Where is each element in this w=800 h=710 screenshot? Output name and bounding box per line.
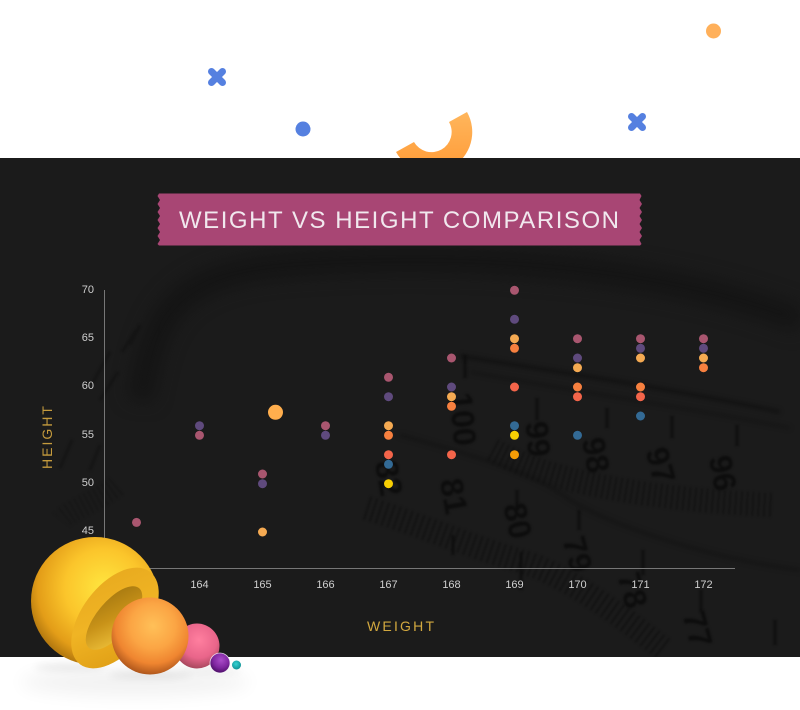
x axis tick labels: 171	[631, 579, 650, 591]
y axis tick labels: 65	[82, 332, 94, 344]
decorative orange arc	[396, 112, 472, 173]
data points: yellow series	[384, 431, 519, 488]
title banner	[158, 194, 642, 246]
y axis tick labels: 50	[82, 477, 94, 489]
x axis tick labels: 169	[505, 579, 524, 591]
decorative dot: blue	[296, 122, 310, 136]
panel: dark measuring tape background: 100	[443, 391, 483, 447]
x axis tick labels: 167	[379, 579, 398, 591]
panel: dark measuring tape background	[0, 157, 800, 657]
data points: purple series	[195, 315, 708, 488]
data point: amber	[510, 450, 519, 459]
panel: dark measuring tape background: 99	[518, 420, 557, 458]
banner ribbon	[158, 194, 642, 246]
x axis title: WEIGHT	[367, 618, 434, 634]
y axis tick labels	[82, 284, 94, 537]
ground shadow	[20, 664, 250, 696]
data point: large highlighted	[268, 405, 283, 420]
data points: blue series	[384, 412, 645, 469]
x axis tick labels: 164	[190, 579, 209, 591]
x axis tick labels: 166	[316, 579, 335, 591]
chart axes	[104, 290, 735, 568]
decorative dot: orange top right	[706, 24, 721, 38]
illustration: 3D spheres	[31, 537, 241, 692]
panel: dark measuring tape background: 96	[702, 452, 744, 494]
panel: dark measuring tape background: 79	[556, 532, 600, 576]
x axis tick labels	[190, 579, 713, 591]
y axis tick labels: 55	[82, 429, 94, 441]
x axis tick labels: 170	[568, 579, 587, 591]
yellow cut sphere	[31, 537, 159, 668]
panel: dark measuring tape background: 78	[611, 568, 655, 612]
orange sphere	[112, 598, 188, 674]
pink sphere	[174, 624, 220, 668]
title text: WEIGHT VS HEIGHT COMPARISON	[179, 207, 619, 234]
data points: red series	[384, 382, 645, 459]
x axis tick labels: 168	[442, 579, 461, 591]
teal sphere	[232, 660, 241, 670]
panel: dark measuring tape background: 82	[368, 457, 410, 499]
purple sphere	[210, 653, 230, 673]
panel: dark measuring tape background: 80	[496, 500, 539, 542]
panel: dark measuring tape background: 77	[676, 607, 720, 651]
x axis tick labels: 172	[694, 579, 713, 591]
y axis tick labels: 70	[82, 284, 94, 296]
y axis tick labels: 60	[82, 380, 94, 392]
icon: blue cross left	[212, 72, 222, 82]
panel: dark measuring tape background: 81	[433, 475, 475, 517]
y axis title: HEIGHT	[39, 406, 55, 469]
icon: blue cross right	[632, 116, 642, 128]
data points: light orange series	[258, 334, 708, 536]
x axis tick labels: 165	[253, 579, 272, 591]
y axis tick labels: 45	[82, 525, 94, 537]
scatter chart	[39, 284, 735, 634]
data points: pink series	[132, 286, 708, 527]
data points: orange series	[384, 344, 708, 440]
panel: dark measuring tape background: 97	[639, 443, 683, 487]
panel: dark measuring tape background: 98	[575, 434, 617, 476]
